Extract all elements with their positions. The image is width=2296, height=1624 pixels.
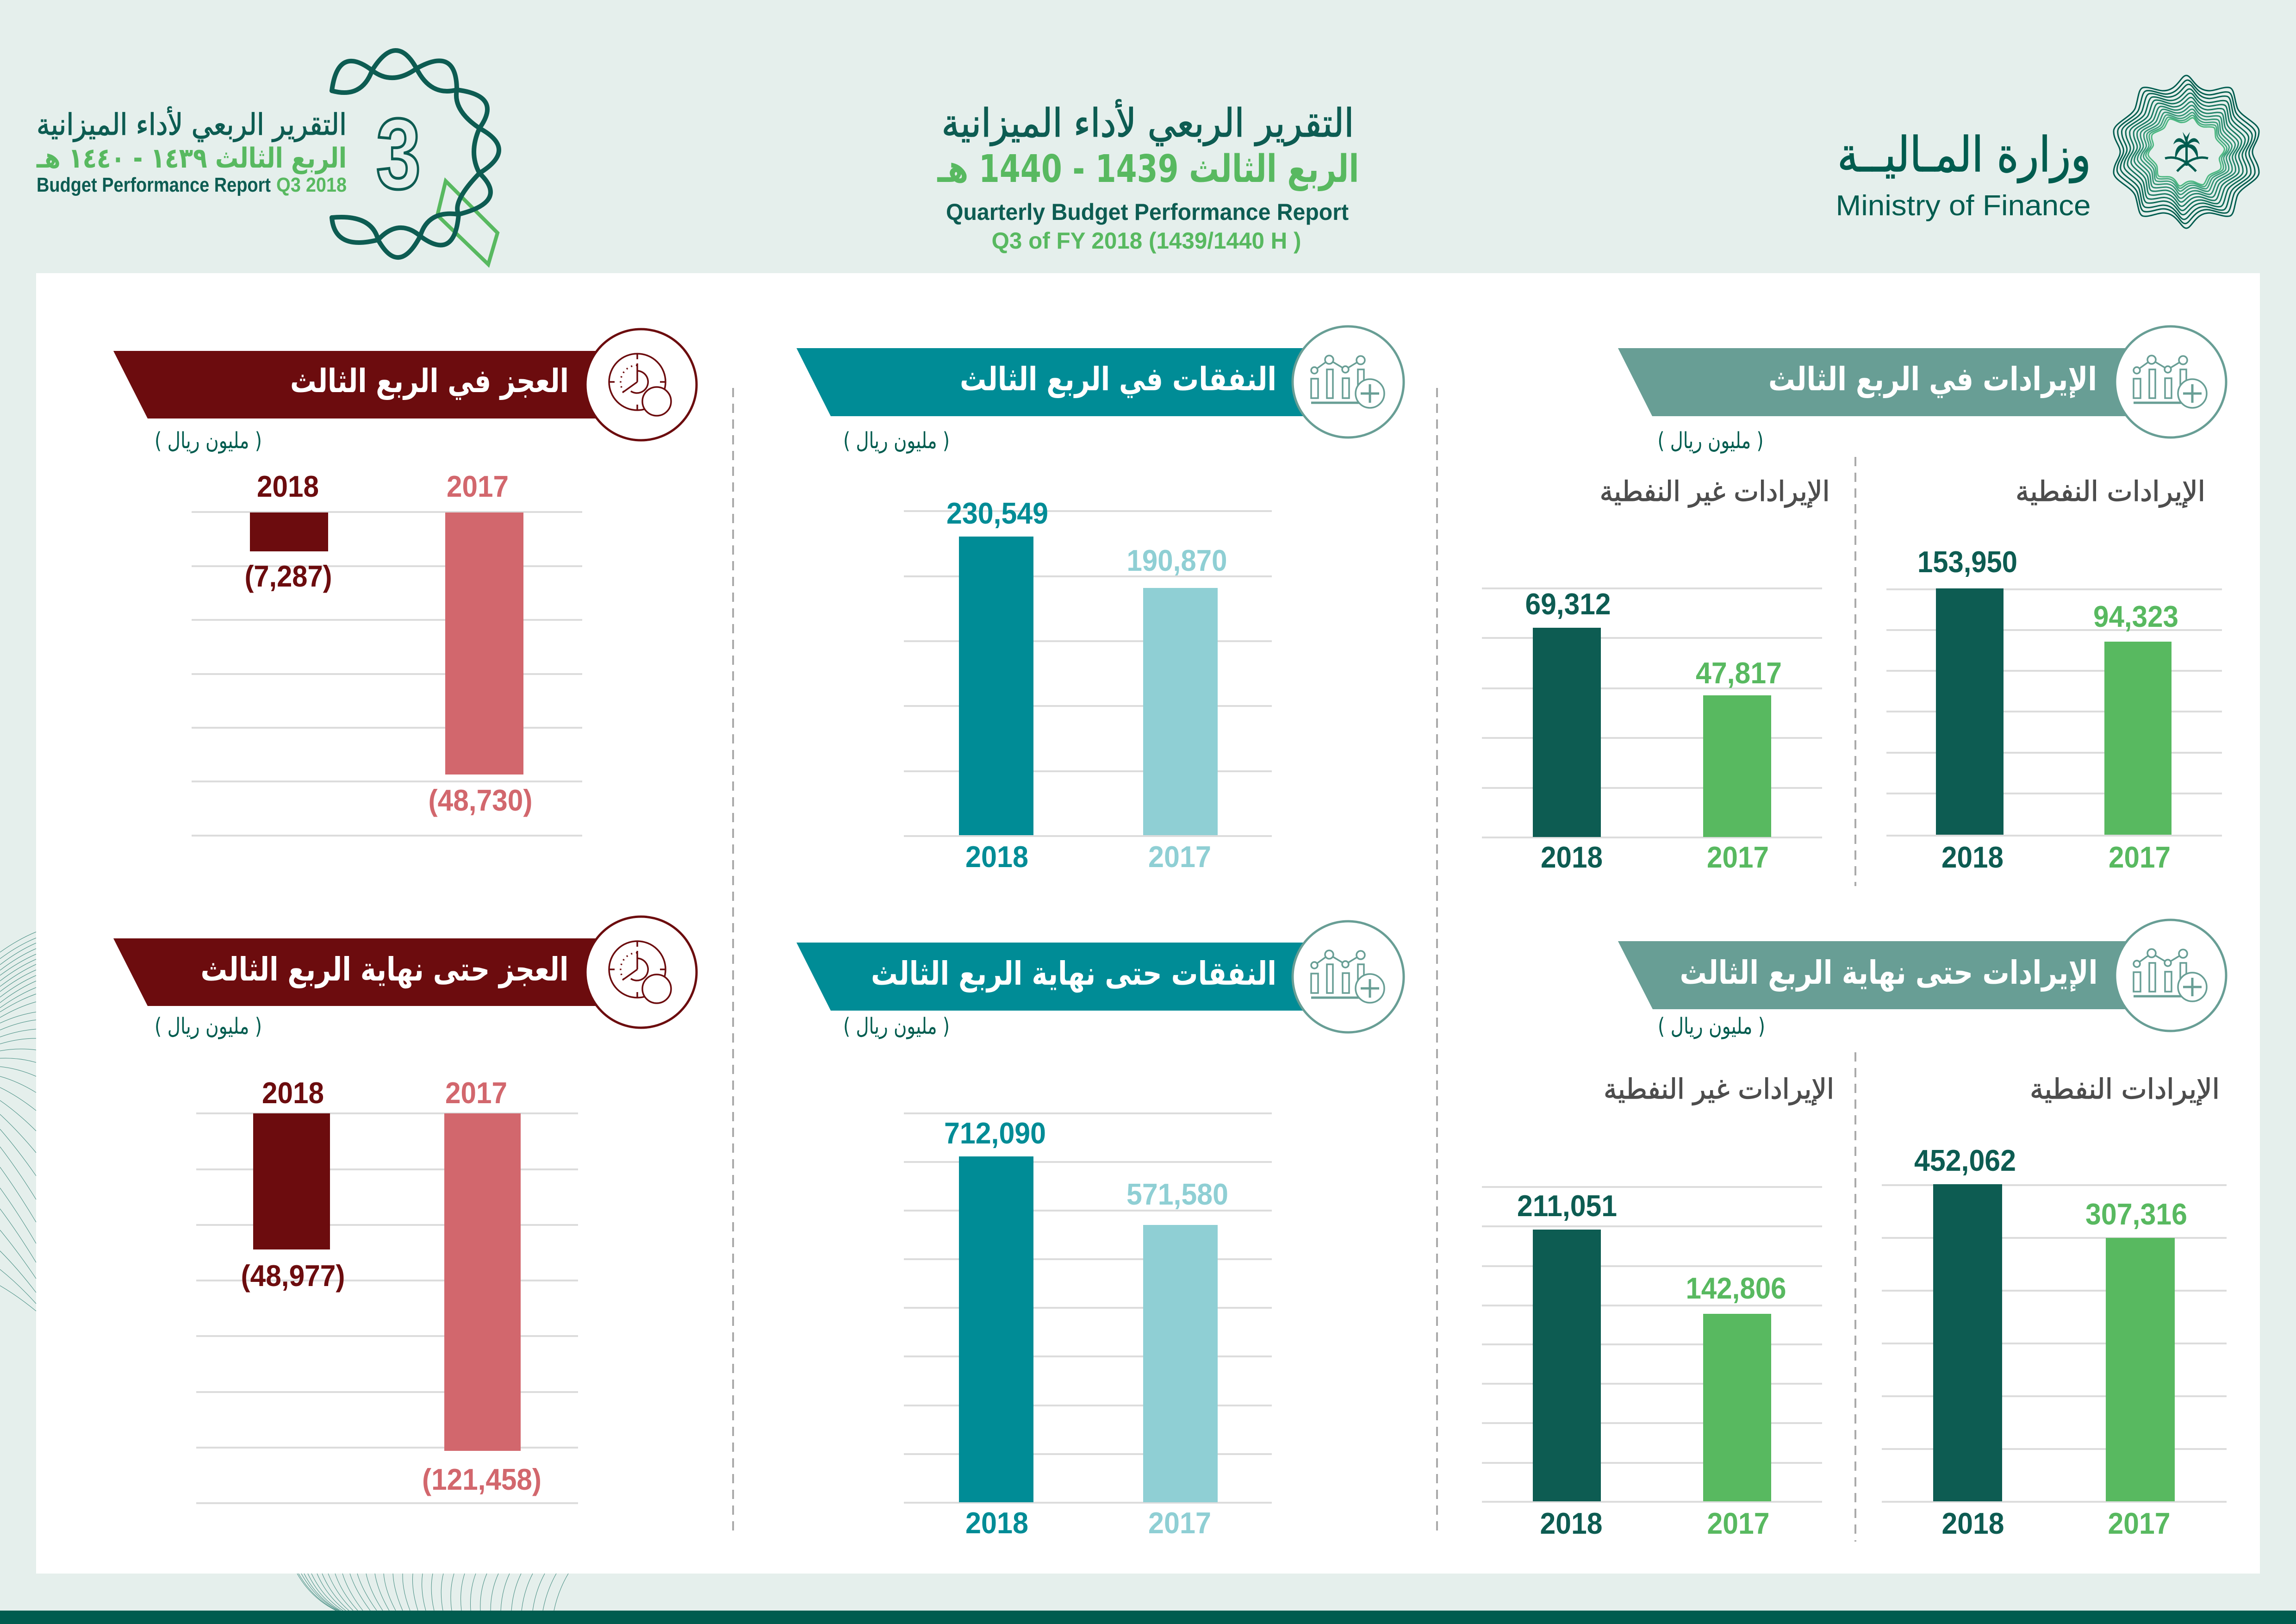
sub heading non oil: الإيرادات غير النفطية xyxy=(1604,1073,1834,1106)
sub heading non oil: الإيرادات غير النفطية xyxy=(1599,475,1830,508)
bar chart: expenditure to end Q3: 2017 xyxy=(1148,1506,1211,1540)
decorative wave lines left xyxy=(0,932,36,1311)
icon: palm and swords xyxy=(2165,132,2208,171)
icon: clock Q3 xyxy=(585,329,697,440)
unit label: ( مليون ريال ) xyxy=(155,428,262,454)
bar chart: expenditure Q3: 2018 xyxy=(965,840,1028,874)
left header english quarter: Q3 2018 xyxy=(276,174,347,196)
bar chart: expenditure Q3: 230,549 xyxy=(946,496,1048,530)
bar chart: deficit to end Q3 xyxy=(196,1076,578,1503)
left header block: report badge xyxy=(36,50,499,264)
bar chart: non oil revenue to end Q3: 142,806 xyxy=(1686,1271,1786,1305)
bar chart: non oil revenue Q3: 69,312 xyxy=(1525,587,1611,621)
bar chart: deficit to end Q3: (121,458) xyxy=(422,1462,541,1496)
bar chart: oil revenue to end Q3: 452,062 xyxy=(1914,1143,2016,1177)
period arabic: الربع الثالث 1439 - 1440 هـ xyxy=(937,147,1359,191)
title arabic: التقرير الربعي لأداء الميزانية xyxy=(941,99,1354,146)
bar chart: non oil revenue Q3 xyxy=(1482,587,1822,874)
period english: Q3 of FY 2018 (1439/1440 H ) xyxy=(991,228,1301,254)
heading: revenue Q3: الإيرادات في الربع الثالث xyxy=(1768,360,2097,399)
panel: deficit to end of Q3 xyxy=(113,917,697,1503)
bar chart: deficit Q3 xyxy=(192,469,582,836)
bar chart: oil revenue to end Q3 xyxy=(1882,1143,2227,1540)
numeral 3 outline: 3 xyxy=(376,98,421,210)
bar chart: oil revenue to end Q3: 2018 xyxy=(1942,1506,2004,1540)
heading: expenditure Q3: النفقات في الربع الثالث xyxy=(960,360,1276,398)
bar chart: expenditure to end Q3: 571,580 xyxy=(1126,1177,1228,1211)
left header arabic title: التقرير الربعي لأداء الميزانية xyxy=(37,106,347,142)
bar chart: deficit to end Q3: 2018 xyxy=(262,1076,324,1110)
bar chart: non oil revenue to end Q3 xyxy=(1482,1187,1822,1540)
bar chart: deficit Q3: (7,287) xyxy=(244,559,332,593)
banner: revenue Q3 xyxy=(1618,348,2171,416)
decorative wave lines bottom xyxy=(297,1574,568,1611)
bar chart: oil revenue Q3: 2017 xyxy=(2109,840,2171,874)
logo arabic text: وزارة المـاليــة xyxy=(1837,126,2091,183)
bar chart: deficit Q3: (48,730) xyxy=(429,783,532,817)
ministry logo xyxy=(1836,75,2259,228)
panel: expenditure to end of Q3 xyxy=(796,921,1404,1540)
bar chart: non oil revenue to end Q3: 211,051 xyxy=(1517,1189,1617,1223)
icon: revenue chart to end Q3 xyxy=(2115,920,2226,1031)
icon: guilloche emblem xyxy=(2114,75,2259,228)
panel: revenue Q3 xyxy=(1482,326,2226,874)
banner: revenue to end Q3 xyxy=(1618,941,2171,1009)
bar chart: deficit Q3: 2018 xyxy=(257,469,319,503)
bar chart: expenditure Q3: 190,870 xyxy=(1126,543,1227,577)
heading: deficit Q3: العجز في الربع الثالث xyxy=(290,362,569,400)
section dividers xyxy=(733,388,1855,1542)
banner: expenditure to end Q3 xyxy=(796,943,1348,1011)
bar chart: oil revenue to end Q3: 307,316 xyxy=(2085,1197,2187,1231)
icon: expenditure chart Q3 xyxy=(1293,326,1404,437)
bar chart: non oil revenue Q3: 2018 xyxy=(1541,840,1603,874)
bar chart: non oil revenue Q3: 2017 xyxy=(1707,840,1769,874)
bar chart: oil revenue Q3: 2018 xyxy=(1941,840,2004,874)
bar chart: expenditure to end Q3: 712,090 xyxy=(944,1116,1046,1150)
bar chart: non oil revenue to end Q3: 2018 xyxy=(1540,1506,1602,1540)
bar chart: expenditure to end Q3 xyxy=(904,1113,1272,1540)
unit label: ( مليون ريال ) xyxy=(1658,428,1763,454)
bottom bar xyxy=(0,1611,2296,1624)
white content panel xyxy=(36,273,2260,1574)
bar chart: oil revenue Q3: 94,323 xyxy=(2093,600,2178,633)
left header english report: Budget Performance Report xyxy=(37,174,271,196)
banner: expenditure Q3 xyxy=(796,348,1348,416)
bar chart: deficit Q3: 2017 xyxy=(447,469,509,503)
unit label: ( مليون ريال ) xyxy=(843,1013,950,1039)
bar chart: expenditure Q3 xyxy=(904,496,1272,874)
logo english text: Ministry of Finance xyxy=(1836,190,2091,222)
banner: deficit to end Q3 xyxy=(113,938,641,1006)
bar chart: deficit to end Q3: 2017 xyxy=(445,1076,507,1110)
icon: revenue chart Q3 xyxy=(2115,326,2226,437)
heading: deficit to end Q3: العجز حتى نهاية الربع الثالث xyxy=(201,950,568,988)
unit label: ( مليون ريال ) xyxy=(155,1013,262,1039)
bar chart: oil revenue to end Q3: 2017 xyxy=(2108,1506,2171,1540)
icon: green diamond xyxy=(437,181,498,264)
panel: revenue to end of Q3 xyxy=(1482,920,2227,1540)
icon: expenditure chart to end Q3 xyxy=(1293,921,1404,1032)
bar chart: non oil revenue Q3: 47,817 xyxy=(1696,656,1782,690)
heading: revenue to end Q3: الإيرادات حتى نهاية الربع الثالث xyxy=(1680,954,2097,992)
icon: clock to end Q3 xyxy=(585,917,697,1028)
panel: deficit Q3 xyxy=(113,329,697,836)
banner: deficit Q3 xyxy=(113,351,641,418)
bar chart: oil revenue Q3 xyxy=(1886,545,2222,874)
unit label: ( مليون ريال ) xyxy=(1658,1013,1765,1039)
bar chart: expenditure to end Q3: 2018 xyxy=(965,1506,1028,1540)
center title block xyxy=(937,99,1359,254)
title english: Quarterly Budget Performance Report xyxy=(946,199,1349,225)
sub heading oil: الإيرادات النفطية xyxy=(2030,1073,2220,1106)
icon: twisted wreath xyxy=(332,50,499,257)
left header arabic period: الربع الثالث ١٤٣٩ - ١٤٤٠ هـ xyxy=(36,142,347,175)
bar chart: expenditure Q3: 2017 xyxy=(1148,840,1211,874)
bar chart: non oil revenue to end Q3: 2017 xyxy=(1707,1506,1770,1540)
bar chart: deficit to end Q3: (48,977) xyxy=(241,1259,345,1293)
sub heading oil: الإيرادات النفطية xyxy=(2016,475,2205,508)
unit label: ( مليون ريال ) xyxy=(843,428,950,454)
bar chart: oil revenue Q3: 153,950 xyxy=(1917,545,2017,579)
heading: expenditure to end Q3: النفقات حتى نهاية الربع الثالث xyxy=(871,955,1276,993)
panel: expenditure Q3 xyxy=(796,326,1404,874)
